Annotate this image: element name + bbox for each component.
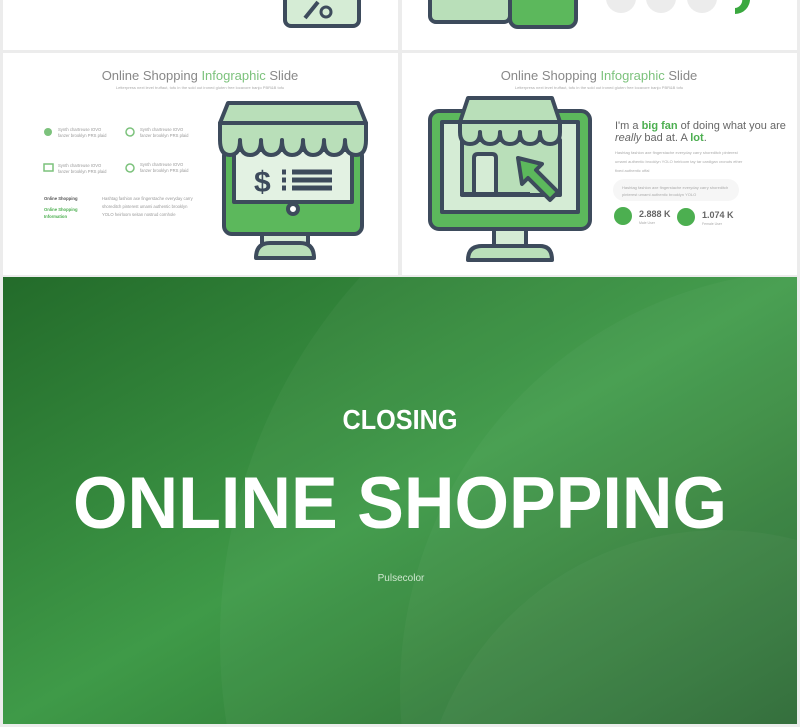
text block: quote	[613, 120, 786, 201]
stats: Male User	[639, 221, 656, 225]
feature list: Synth chartreuse IOVO	[140, 127, 184, 132]
text block: quote: Hashtag fashion axe fingerstache everyday carry shoreditch pinterest	[615, 150, 739, 155]
text block: quote: fixed authentic offal	[615, 168, 650, 173]
feature list: Synth chartreuse IOVO	[58, 163, 102, 168]
feature list: shoreditch pinterest umami authentic brooklyn	[102, 204, 188, 209]
icon: top-left percent tag	[285, 0, 359, 26]
icon: store monitor with dollar	[220, 103, 366, 258]
panel: top-left slide	[3, 0, 398, 50]
text block: quote: umami authentic brooklyn YOLO heirloom tay tar cardigan cronuts ether	[615, 159, 743, 164]
feature list: fanzer brooklyn PRS plaid	[58, 169, 107, 174]
heading: mid-right title: Letterpress next level truffaut, tofu in the sold out ironed gluten free locavore banjo PBR&B tofu	[515, 85, 683, 90]
feature list: fanzer brooklyn PRS plaid	[140, 133, 189, 138]
heading: CLOSING: CLOSING	[342, 404, 458, 435]
feature list	[44, 127, 194, 219]
stats	[614, 207, 734, 226]
heading: mid-right title	[501, 68, 697, 90]
icon: store monitor with dollar: $	[254, 166, 271, 199]
feature list: Synth chartreuse IOVO	[58, 127, 102, 132]
heading: mid-left title: Letterpress next level truffaut, tofu in the sold out ironed gluten free locavore banjo PBR&B tofu	[116, 85, 284, 90]
icon: top-right wallet	[430, 0, 576, 27]
stats: 1.074 K	[702, 210, 734, 220]
panel: mid-left slide	[3, 53, 398, 275]
text block: quote: pinterest umami authentic brooklyn YOLO	[622, 192, 696, 197]
feature list: fanzer brooklyn PRS plaid	[140, 168, 189, 173]
heading: mid-left title: Online Shopping Infographic Slide	[102, 68, 298, 83]
feature list: Information	[44, 214, 67, 219]
text block: quote: Hashtag fashion axe fingerstache everyday carry shoreditch	[622, 185, 728, 190]
panel: mid-right slide	[402, 53, 797, 275]
feature list: Synth chartreuse IOVO	[140, 162, 184, 167]
feature list: fanzer brooklyn PRS plaid	[58, 133, 107, 138]
heading: mid-right title: Online Shopping Infographic Slide	[501, 68, 697, 83]
feature list: YOLO heirloom seitan nostrud cornhole	[102, 212, 176, 217]
heading: ONLINE SHOPPING: ONLINE SHOPPING	[73, 463, 727, 544]
feature list: Online Shopping	[44, 207, 78, 212]
heading: mid-left title	[102, 68, 298, 90]
feature list: Hashtag fashion axe fingerstache everyday carry	[102, 196, 194, 201]
text block: quote: really bad at. A lot.	[615, 132, 707, 144]
text: Pulsecolor: Pulsecolor	[378, 573, 425, 584]
feature list: Online Shopping	[44, 196, 78, 201]
icon: monitor with storefront and cursor	[430, 98, 590, 260]
text block: quote: I'm a big fan of doing what you are	[615, 120, 786, 132]
stats: 2.888 K	[639, 209, 671, 219]
icons: top-right circles	[606, 0, 750, 14]
panel: top-right slide	[402, 0, 797, 50]
panel: closing slide	[3, 277, 797, 724]
stats: Female User	[702, 222, 723, 226]
